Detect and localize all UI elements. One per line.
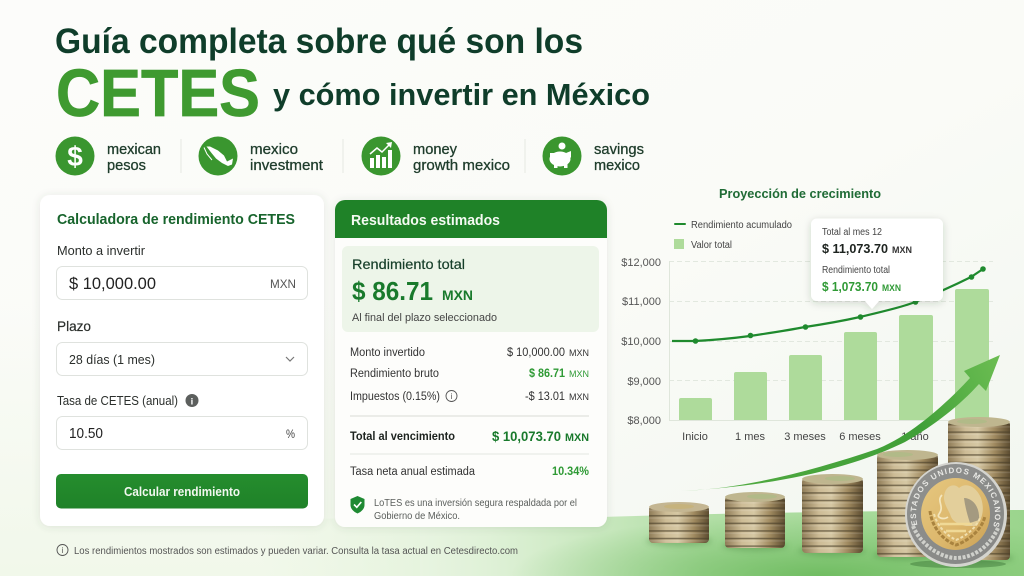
icon: dollar (56, 136, 94, 176)
row: amount invested: $ 10,000.00 (507, 347, 565, 359)
legend: Valor total (691, 240, 732, 251)
y axis labels: $12,000 (621, 257, 661, 269)
label: mexican pesos: mexican (107, 142, 161, 158)
tooltip: $ 1,073.70 (822, 280, 878, 294)
panel: results (335, 200, 607, 527)
row: total at maturity: Total al vencimiento (350, 431, 455, 443)
label: savings mexico: mexico (594, 158, 640, 174)
y axis labels: $8,000 (627, 415, 661, 427)
label: mexico investment: investment (250, 158, 323, 174)
stack 5 (946, 417, 1014, 563)
icon: shield (350, 496, 364, 514)
row: taxes: -$ 13.01 (525, 391, 565, 403)
total yield box: Rendimiento total (352, 256, 465, 272)
total yield box (342, 246, 599, 332)
y axis labels: $10,000 (621, 336, 661, 348)
icon: dollar: $ (67, 141, 83, 172)
stack 1 (646, 502, 712, 546)
laurel wreath (913, 526, 998, 558)
x axis labels: 6 meses (839, 431, 881, 443)
chart (621, 186, 993, 443)
icon: money growth (362, 136, 400, 176)
row: total at maturity: MXN (565, 432, 589, 444)
label: mexico investment (250, 142, 323, 174)
field: rate (56, 394, 308, 450)
x axis labels: 3 meses (784, 431, 826, 443)
field: amount (56, 244, 308, 300)
row: gross yield: Rendimiento bruto (350, 368, 439, 380)
stack 4 (873, 450, 941, 560)
label: savings mexico: savings (594, 142, 644, 158)
footer note: Los rendimientos mostrados son estimados y pueden variar. Consulta la tasa actual en Cetesdirecto.com (74, 546, 518, 557)
title: Guía completa sobre qué son los (55, 22, 583, 61)
growth arrow (680, 355, 1000, 491)
x axis labels: 1 año (901, 431, 929, 443)
tooltip: MXN (882, 283, 901, 294)
field: rate: i (191, 396, 193, 408)
x axis labels: Inicio (682, 431, 708, 443)
row: gross yield: MXN (569, 369, 589, 380)
row: taxes: i (451, 392, 453, 401)
row: net rate: 10.34% (552, 466, 589, 478)
row: taxes: Impuestos (0.15%) (350, 391, 440, 403)
safety note (374, 498, 577, 522)
row: amount invested (350, 347, 589, 359)
results header (335, 200, 607, 238)
gridlines (669, 262, 993, 380)
field: rate: 10.50 (69, 426, 103, 442)
results header: Resultados estimados (351, 213, 500, 229)
safety note: Gobierno de México. (374, 511, 460, 522)
row: taxes: MXN (569, 392, 589, 403)
field: term: 28 días (1 mes) (69, 352, 155, 367)
row: gross yield (350, 368, 589, 380)
row: taxes (350, 390, 589, 403)
row: amount invested: Monto invertido (350, 347, 425, 359)
field: term: Plazo (57, 318, 91, 334)
field: term (56, 318, 308, 376)
y axis labels: $11,000 (622, 296, 661, 308)
label: money growth mexico (413, 142, 510, 174)
label: money growth mexico: money (413, 142, 458, 158)
button (56, 474, 308, 508)
calculator heading: Calculadora de rendimiento CETES (57, 212, 295, 228)
title (55, 22, 650, 131)
row: net rate: Tasa neta anual estimada (350, 466, 476, 478)
y axis labels (621, 257, 661, 427)
row: total at maturity (350, 428, 589, 444)
button: Calcular rendimiento (124, 485, 240, 499)
legend (674, 220, 792, 251)
panel: calculator (40, 195, 324, 526)
label: mexican pesos (107, 142, 161, 174)
field: amount: $ 10,000.00 (69, 275, 156, 293)
tooltip: Total al mes 12 (822, 227, 882, 238)
title: CETES (56, 56, 260, 131)
field: amount: MXN (270, 279, 296, 291)
footer note: i (62, 546, 64, 555)
total yield box: $ 86.71 (352, 276, 433, 306)
bars (679, 289, 989, 420)
legend: Rendimiento acumulado (691, 220, 792, 231)
safety note: LoTES es una inversión segura respaldada por el (374, 498, 577, 509)
tooltip (811, 218, 943, 309)
field: amount: Monto a invertir (57, 244, 145, 258)
row: amount invested: MXN (569, 348, 589, 359)
tooltip: $ 11,073.70 (822, 242, 888, 256)
field: rate: Tasa de CETES (anual) (57, 394, 178, 408)
row: gross yield: $ 86.71 (529, 368, 566, 380)
y axis labels: $9,000 (627, 376, 661, 388)
tooltip: MXN (892, 245, 912, 256)
ground (260, 510, 1024, 576)
tooltip: Rendimiento total (822, 265, 890, 276)
row: total at maturity: $ 10,073.70 (492, 428, 561, 444)
total yield box: MXN (442, 287, 473, 303)
eagle emblem (930, 485, 985, 545)
icon: piggy bank (542, 136, 582, 176)
label: savings mexico (594, 142, 644, 174)
topic row (56, 136, 644, 176)
stack 2 (722, 492, 788, 551)
total yield box: Al final del plazo seleccionado (352, 312, 497, 324)
x axis labels: 1 mes (735, 431, 765, 443)
coin stacks (646, 417, 1014, 563)
label: money growth mexico: growth mexico (413, 158, 510, 174)
label: mexico investment: mexico (250, 142, 298, 158)
icon: mexico map (198, 136, 238, 176)
big peso coin: ESTADOS UNIDOS MEXICANOS (910, 468, 1000, 527)
label: mexican pesos: pesos (107, 158, 146, 174)
stack 3 (798, 474, 866, 556)
big peso coin (905, 462, 1007, 568)
x axis labels (682, 431, 929, 443)
line: cumulative yield (672, 266, 986, 344)
title: y cómo invertir en México (273, 77, 650, 112)
chart title: Proyección de crecimiento (719, 186, 881, 201)
field: rate: % (286, 427, 295, 441)
row: net rate (350, 466, 589, 478)
